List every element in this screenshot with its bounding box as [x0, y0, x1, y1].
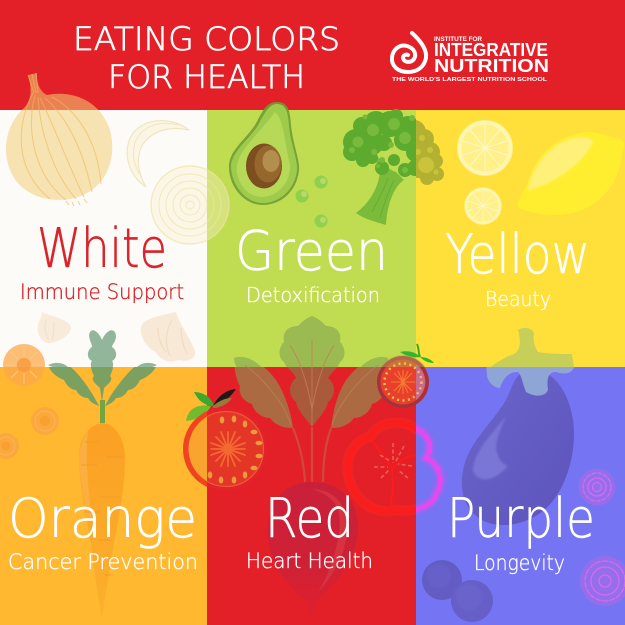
- tomato leaves: [186, 389, 236, 421]
- logo: Institute for Integrative Nutrition: [392, 33, 549, 83]
- carrot leaves: [48, 330, 157, 423]
- panel: red: [207, 367, 416, 625]
- logo: Institute for Integrative Nutrition: INTEGRATIVE: [434, 39, 548, 60]
- panel: yellow: [416, 110, 625, 367]
- icon: beet: [234, 316, 389, 618]
- icon: blueberries: [422, 560, 493, 622]
- label: orange: Orange: [8, 487, 197, 550]
- label: green: Detoxification: [246, 283, 380, 307]
- icon: avocado: [229, 102, 299, 205]
- label: yellow: [445, 223, 590, 311]
- label: purple: Purple: [447, 487, 595, 550]
- beet leaves: [234, 316, 389, 428]
- panel: purple: [416, 367, 625, 625]
- title: EATING COLORS: [73, 20, 340, 58]
- label: orange: Cancer Prevention: [8, 550, 198, 574]
- label: purple: [447, 487, 595, 575]
- label: yellow: Beauty: [485, 287, 551, 311]
- beet stems: [293, 427, 331, 482]
- label: red: Red: [265, 487, 354, 550]
- title: [73, 20, 340, 96]
- title: FOR HEALTH: [108, 58, 305, 96]
- logo: Institute for Integrative Nutrition: THE WORLD'S LARGEST NUTRITION SCHOOL: [392, 77, 548, 83]
- icon: onion ring slice: [151, 166, 229, 244]
- label: white: [20, 217, 184, 304]
- panel: green: [207, 110, 416, 367]
- label: red: [246, 487, 373, 573]
- icon: broccoli: [343, 109, 444, 225]
- icon: lemon slice large: [458, 121, 512, 175]
- icon: onion: [6, 73, 112, 206]
- icon: carrot slices: [0, 344, 59, 459]
- icon: tomato large: [183, 389, 267, 491]
- icon: onion crescent: [127, 121, 189, 187]
- icon: eggplant: [462, 328, 576, 525]
- label: yellow: Yellow: [445, 223, 590, 286]
- label: green: [235, 220, 388, 307]
- icon: lemon: [518, 132, 624, 215]
- label: red: Heart Health: [246, 549, 373, 573]
- label: purple: Longevity: [474, 551, 565, 575]
- icon: garlic small: [38, 312, 71, 343]
- panel: orange: [0, 367, 207, 625]
- icon: red pepper slice: [348, 423, 440, 511]
- label: white: Immune Support: [20, 280, 184, 304]
- logo: Institute for Integrative Nutrition: INSTITUTE FOR: [434, 36, 483, 43]
- header band: [0, 0, 625, 110]
- avocado pit: [246, 144, 282, 188]
- eggplant cap: [486, 328, 576, 396]
- icon: peas: [296, 176, 328, 228]
- label: white: White: [37, 217, 167, 280]
- carrot body: [79, 423, 125, 618]
- icon: purple slices: [578, 468, 625, 606]
- icon: tomato small: [377, 344, 434, 408]
- logo swirl: [392, 33, 426, 72]
- label: green: Green: [235, 220, 388, 283]
- beet root: [268, 482, 358, 618]
- icon: lemon slice small: [465, 188, 501, 224]
- icon: garlic large: [141, 312, 195, 362]
- logo: Institute for Integrative Nutrition: NUTRITION: [434, 55, 549, 76]
- panel: white: [0, 110, 207, 367]
- icon: carrot: [48, 330, 157, 618]
